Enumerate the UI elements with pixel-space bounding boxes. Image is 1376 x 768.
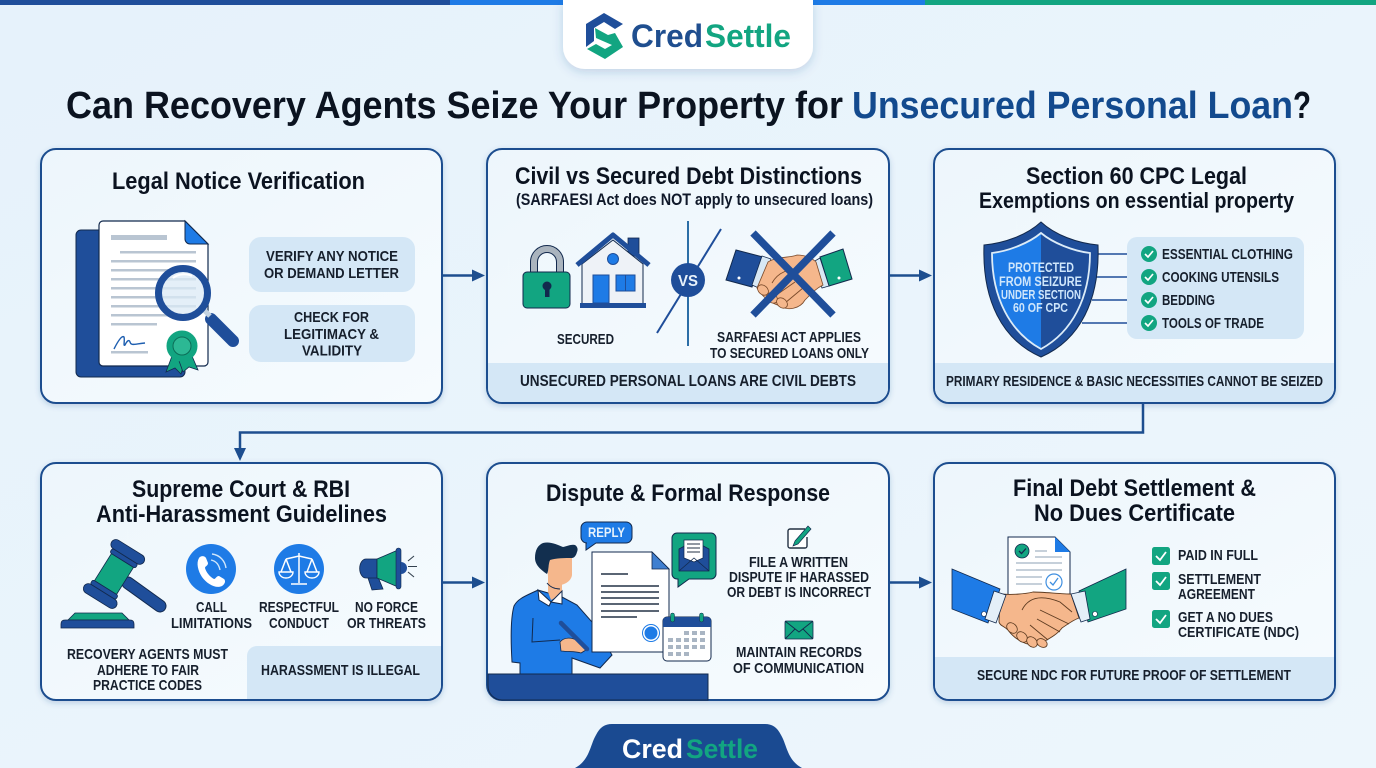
icon: padlock <box>523 249 570 308</box>
footer band <box>935 363 1334 402</box>
heading: Supreme Court & RBI <box>132 476 350 503</box>
callout: check legitimacy: CHECK FOR <box>294 310 369 326</box>
icon: envelope <box>785 621 813 639</box>
logo wordmark: Cred <box>631 18 703 54</box>
icon: CredSettle logo mark <box>586 13 623 59</box>
panel: final debt settlement <box>934 463 1335 700</box>
text: maintain records <box>733 645 864 677</box>
callout: harassment is illegal: HARASSMENT IS ILLEGAL <box>261 663 420 679</box>
icon: shield <box>984 222 1098 357</box>
heading: Final Debt Settlement & <box>1013 475 1256 502</box>
text: fair practice codes: PRACTICE CODES <box>93 678 202 694</box>
icon: shield: PROTECTED <box>1008 260 1074 275</box>
callout: check legitimacy: LEGITIMACY & <box>284 327 379 343</box>
label: sarfaesi applies: TO SECURED LOANS ONLY <box>710 346 869 362</box>
icon: gavel <box>61 538 160 628</box>
label: respectful conduct <box>259 600 339 632</box>
footer badge: Settle <box>686 734 758 764</box>
icon: calendar <box>663 613 711 661</box>
checklist panel: COOKING UTENSILS <box>1162 270 1279 286</box>
text: fair practice codes <box>67 647 228 694</box>
icon: shield: 60 OF CPC <box>1013 300 1068 315</box>
illustration: person writing <box>511 542 612 674</box>
footer band <box>935 657 1334 699</box>
callout: verify notice <box>249 237 415 292</box>
icon: crossed-out handshake <box>726 233 852 315</box>
checklist: PAID IN FULL <box>1178 548 1258 564</box>
icon: house <box>577 235 649 308</box>
title: ? <box>1293 85 1311 127</box>
panel: legal notice verification <box>41 149 442 403</box>
desk <box>488 674 708 700</box>
text: file a written dispute: OR DEBT IS INCORRECT <box>727 585 871 601</box>
checklist panel: TOOLS OF TRADE <box>1162 316 1264 332</box>
callout: check legitimacy: VALIDITY <box>302 344 362 360</box>
footer text: UNSECURED PERSONAL LOANS ARE CIVIL DEBTS <box>520 373 856 390</box>
logo wordmark <box>631 18 791 54</box>
title: Unsecured Personal Loan <box>852 85 1293 127</box>
title: Can Recovery Agents Seize Your Property for <box>66 85 843 127</box>
text: maintain records: OF COMMUNICATION <box>733 661 864 677</box>
heading: Civil vs Secured Debt Distinctions <box>515 163 862 190</box>
panel: supreme court and rbi <box>41 463 442 700</box>
footer text: SECURE NDC FOR FUTURE PROOF OF SETTLEMENT <box>977 668 1291 684</box>
label: call limitations: LIMITATIONS <box>171 616 252 632</box>
checklist <box>1152 547 1299 641</box>
checklist: CERTIFICATE (NDC) <box>1178 625 1299 641</box>
icon: shield: FROM SEIZURE <box>999 274 1082 289</box>
title <box>66 85 1311 127</box>
text: maintain records: MAINTAIN RECORDS <box>736 645 862 661</box>
label: no force or threats <box>347 600 426 632</box>
checklist: GET A NO DUES <box>1178 610 1273 626</box>
icon: edit pencil <box>788 526 811 548</box>
label: secured: SECURED <box>557 332 614 348</box>
heading: Anti-Harassment Guidelines <box>96 501 387 528</box>
label: sarfaesi applies: SARFAESI ACT APPLIES <box>717 330 861 346</box>
logo wordmark: Settle <box>705 18 791 54</box>
heading: Legal Notice Verification <box>112 168 365 195</box>
connector lines <box>1082 254 1137 323</box>
vs divider: VS <box>678 273 698 290</box>
icon: reply speech bubble <box>581 522 632 550</box>
heading <box>979 163 1295 213</box>
icon: document with stamp <box>592 552 669 652</box>
label: no force or threats: NO FORCE <box>355 600 418 616</box>
icon: phone <box>186 544 236 594</box>
callout: harassment is illegal <box>247 646 441 699</box>
label: no force or threats: OR THREATS <box>347 616 426 632</box>
arrow: card 2 to card 3 <box>889 270 932 282</box>
text: fair practice codes: ADHERE TO FAIR <box>97 663 199 679</box>
arrow: card 5 to card 6 <box>889 576 932 588</box>
callout: verify notice: VERIFY ANY NOTICE <box>266 249 398 265</box>
text: file a written dispute <box>727 555 871 601</box>
label: call limitations: CALL <box>196 600 227 616</box>
icon: shield: UNDER SECTION <box>1001 287 1081 302</box>
checklist: SETTLEMENT <box>1178 572 1261 588</box>
icon: mail speech bubble <box>672 533 716 587</box>
panel: civil vs secured debt <box>487 149 889 403</box>
heading: Dispute & Formal Response <box>546 480 830 507</box>
logo badge <box>563 0 813 69</box>
illustration: certificate and handshake <box>952 537 1126 649</box>
arrow: card 4 to card 5 <box>442 576 485 588</box>
callout: verify notice: OR DEMAND LETTER <box>264 266 399 282</box>
heading: Section 60 CPC Legal <box>1026 163 1247 190</box>
icon: scales of justice <box>274 544 324 594</box>
icon: document under magnifier with seal <box>76 221 233 377</box>
footer badge <box>575 724 802 768</box>
icon: reply speech bubble: REPLY <box>588 524 626 540</box>
text: file a written dispute: DISPUTE IF HARASSED <box>729 570 869 586</box>
footer band <box>488 363 888 402</box>
heading: Exemptions on essential property <box>979 188 1295 213</box>
heading <box>1013 475 1256 527</box>
arrow: card 3 down to card 4 <box>234 403 1143 461</box>
label: respectful conduct: CONDUCT <box>269 616 329 632</box>
text: file a written dispute: FILE A WRITTEN <box>749 555 848 571</box>
checklist panel: ESSENTIAL CLOTHING <box>1162 247 1293 263</box>
footer badge: Cred <box>622 734 683 764</box>
label: respectful conduct: RESPECTFUL <box>259 600 339 616</box>
subheading: (SARFAESI Act does NOT apply to unsecured loans) <box>516 191 873 209</box>
checklist: AGREEMENT <box>1178 587 1255 603</box>
text: fair practice codes: RECOVERY AGENTS MUST <box>67 647 228 663</box>
arrow: card 1 to card 2 <box>442 270 485 282</box>
vs divider <box>657 221 721 346</box>
heading <box>96 476 387 528</box>
checklist panel <box>1127 237 1304 339</box>
icon: megaphone <box>360 548 417 590</box>
callout: check legitimacy <box>249 305 415 362</box>
top colour bar <box>0 0 1376 5</box>
label: call limitations <box>171 600 252 632</box>
panel: section 60 cpc <box>934 149 1335 403</box>
label: sarfaesi applies <box>710 330 869 362</box>
panel: dispute and formal response <box>487 463 889 700</box>
heading: No Dues Certificate <box>1034 500 1235 527</box>
checklist panel: BEDDING <box>1162 293 1215 309</box>
